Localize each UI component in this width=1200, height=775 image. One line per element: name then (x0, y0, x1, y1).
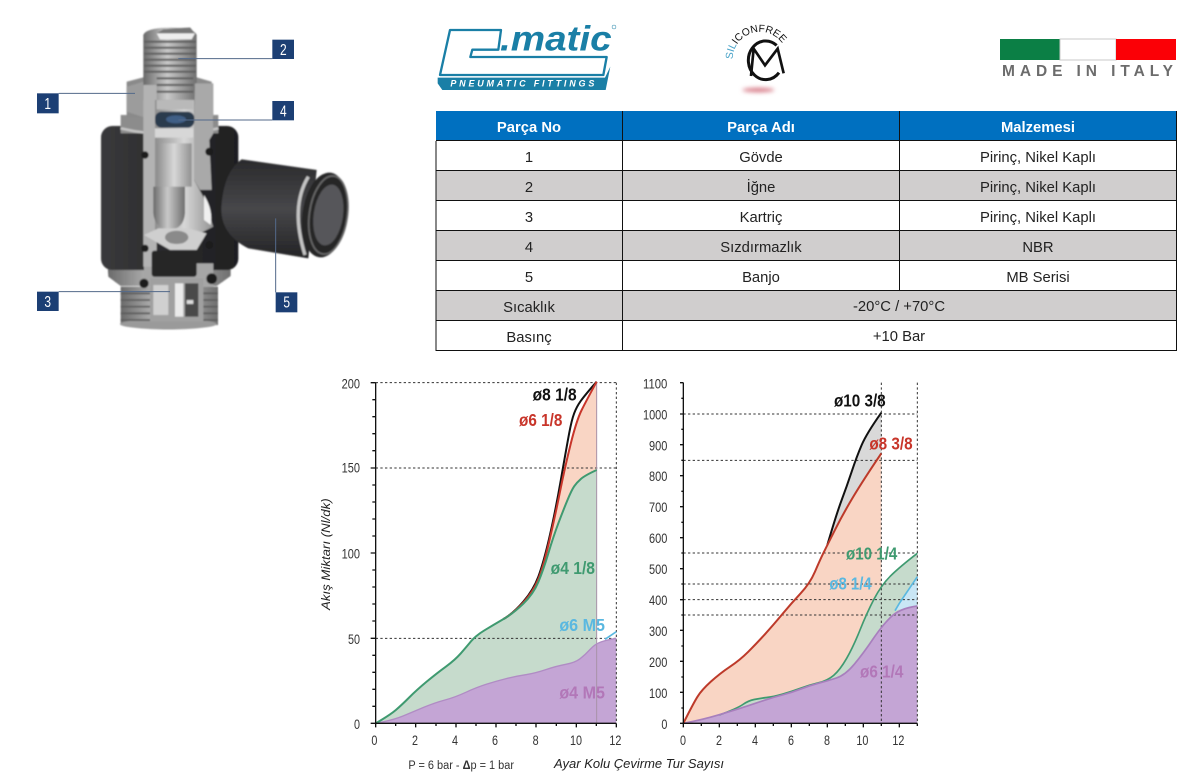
axes and ticks (680, 383, 917, 727)
cartridge slots (150, 278, 203, 322)
callout 3 (37, 292, 59, 311)
x axis labels: 8 (533, 732, 539, 748)
table row pressure: Basınç (506, 330, 552, 346)
curve labels: ø4 1/8 (551, 558, 595, 578)
table row 3: 3 (525, 210, 533, 226)
curve: o4 M5 (376, 638, 616, 723)
callout 2 (272, 40, 294, 59)
curve: o10 1/4 (719, 553, 917, 715)
logo: C.matic: PNEUMATIC FITTINGS (450, 79, 594, 89)
curve labels (519, 385, 605, 702)
curve: o10 3/8 (827, 413, 881, 545)
logo: C.matic (438, 19, 616, 90)
curve: o4 1/8 (376, 470, 597, 723)
x axis labels: 2 (412, 732, 418, 748)
logo: C.matic: .matic (500, 19, 612, 58)
callout 2: 2 (280, 42, 287, 59)
o-ring seal (155, 112, 194, 128)
cartridge seat (144, 228, 207, 250)
y axis labels: 200 (649, 654, 667, 670)
body wall cutaway (144, 83, 213, 287)
y axis labels: 0 (661, 716, 668, 732)
y axis labels: 1000 (643, 406, 667, 422)
internal cavity (155, 100, 213, 233)
curve labels: ø8 1/8 (533, 385, 577, 405)
y axis labels (643, 375, 668, 732)
y axis labels: 400 (649, 592, 667, 608)
x axis labels: 4 (752, 732, 758, 748)
table row temperature: -20°C / +70°C (853, 299, 945, 315)
axes and ticks (371, 383, 616, 727)
x axis labels: 4 (452, 732, 458, 748)
y axis labels: 300 (649, 623, 667, 639)
hex nut (127, 77, 213, 117)
y axis labels: 800 (649, 468, 667, 484)
curve: o6 1/4 (683, 606, 917, 723)
x axis labels: 6 (492, 732, 498, 748)
chart: flow rate large ports (643, 375, 917, 748)
x axis title: Ayar Kolu Çevirme Tur Sayısı (553, 756, 724, 771)
illustration: cutaway flow control fitting (37, 27, 353, 329)
curve labels: ø6 1/4 (860, 661, 904, 681)
needle shaft (153, 128, 193, 229)
table row 1: 1 (525, 150, 533, 166)
side port tube (221, 159, 353, 260)
table row 4: Sızdırmazlık (720, 240, 802, 256)
callout 4 (272, 101, 294, 120)
x axis labels: 10 (856, 732, 868, 748)
y axis labels: 600 (649, 530, 667, 546)
x axis labels: 0 (680, 732, 686, 748)
table row 3: Pirinç, Nikel Kaplı (980, 210, 1096, 226)
table row 4: 4 (525, 240, 533, 256)
area fills (683, 413, 917, 723)
table row temperature (503, 299, 945, 316)
callout 1: 1 (44, 96, 51, 113)
logo: silicone free (726, 24, 788, 96)
x axis labels: 8 (824, 732, 830, 748)
x axis labels: 10 (570, 732, 582, 748)
x axis labels (680, 732, 904, 748)
x axis labels: 2 (716, 732, 722, 748)
y axis labels: 50 (348, 631, 360, 647)
table header: Parça No (497, 120, 561, 136)
callout 1 (37, 93, 59, 113)
x axis labels (371, 732, 621, 748)
callout 3: 3 (44, 294, 51, 311)
bottom threaded section (120, 287, 218, 329)
y axis labels: 200 (342, 375, 360, 391)
table row pressure (506, 329, 925, 346)
table row 5: 5 (525, 270, 533, 286)
y axis labels (342, 375, 360, 732)
table header (436, 111, 1177, 141)
threaded needle stem (143, 27, 197, 100)
logo: made in italy: MADE IN ITALY (1002, 63, 1174, 80)
black seal (152, 251, 197, 277)
table row 2: İğne (747, 178, 775, 196)
curve labels: ø4 M5 (559, 682, 605, 702)
y axis title: Akış Miktarı (Nl/dk) (319, 498, 333, 611)
curve labels: ø10 1/4 (846, 543, 898, 563)
table row 2: 2 (525, 180, 533, 196)
table row 1 (525, 150, 1096, 166)
y axis labels: 100 (342, 545, 360, 561)
table row 3 (525, 210, 1096, 226)
table row 2: Pirinç, Nikel Kaplı (980, 180, 1096, 196)
table row pressure: +10 Bar (873, 329, 925, 345)
table row 5: MB Serisi (1006, 270, 1070, 286)
table header: Parça Adı (727, 120, 795, 136)
black o-ring dots (139, 148, 217, 288)
y axis labels: 100 (649, 685, 667, 701)
area fills (376, 382, 616, 723)
table row 1: Pirinç, Nikel Kaplı (980, 150, 1096, 166)
curve: o6 1/8 (503, 382, 597, 619)
y axis labels: 900 (649, 437, 667, 453)
table row 5: Banjo (742, 270, 780, 286)
table row 4: NBR (1022, 240, 1054, 256)
lower collar (107, 262, 231, 286)
table header: Malzemesi (1001, 120, 1075, 136)
curve: o6 M5 (605, 632, 616, 639)
curve labels: ø8 1/4 (829, 573, 872, 593)
x axis labels: 12 (892, 732, 904, 748)
y axis labels: 0 (354, 716, 360, 732)
x axis labels: 0 (371, 732, 378, 748)
black sleeve (101, 126, 238, 270)
table row 2 (525, 178, 1096, 196)
y axis labels: 500 (649, 561, 667, 577)
curve: o8 1/8 (503, 382, 597, 619)
y axis labels: 150 (342, 460, 360, 476)
curve: o8 1/4 (895, 577, 917, 611)
callout 5 (276, 292, 297, 312)
curve labels: ø6 1/8 (519, 410, 563, 430)
callout 5: 5 (283, 295, 290, 312)
test condition note: P = 6 bar - Δp = 1 bar (408, 758, 514, 772)
callout 4: 4 (280, 103, 287, 120)
upper flange (121, 115, 218, 133)
curve labels (829, 391, 913, 681)
curve labels: ø10 3/8 (834, 391, 886, 411)
curve labels: ø6 M5 (559, 615, 605, 635)
x axis labels: 6 (788, 732, 794, 748)
chart: flow rate small ports (319, 375, 621, 772)
table row 5 (525, 270, 1070, 286)
y axis labels: 700 (649, 499, 667, 515)
table row 1: Gövde (739, 150, 783, 166)
curve labels: ø8 3/8 (869, 433, 913, 453)
table: parts and materials (436, 111, 1177, 351)
table row 4 (525, 240, 1054, 256)
leader lines (59, 59, 276, 292)
x axis labels: 12 (609, 732, 621, 748)
curve: o8 3/8 (683, 453, 881, 723)
logo: made in italy (1000, 39, 1176, 80)
table row 3: Kartriç (740, 210, 783, 226)
logo: silicone free: SILICONFREE (726, 24, 788, 59)
table row temperature: Sıcaklık (503, 300, 555, 316)
y axis labels: 1100 (643, 375, 668, 391)
